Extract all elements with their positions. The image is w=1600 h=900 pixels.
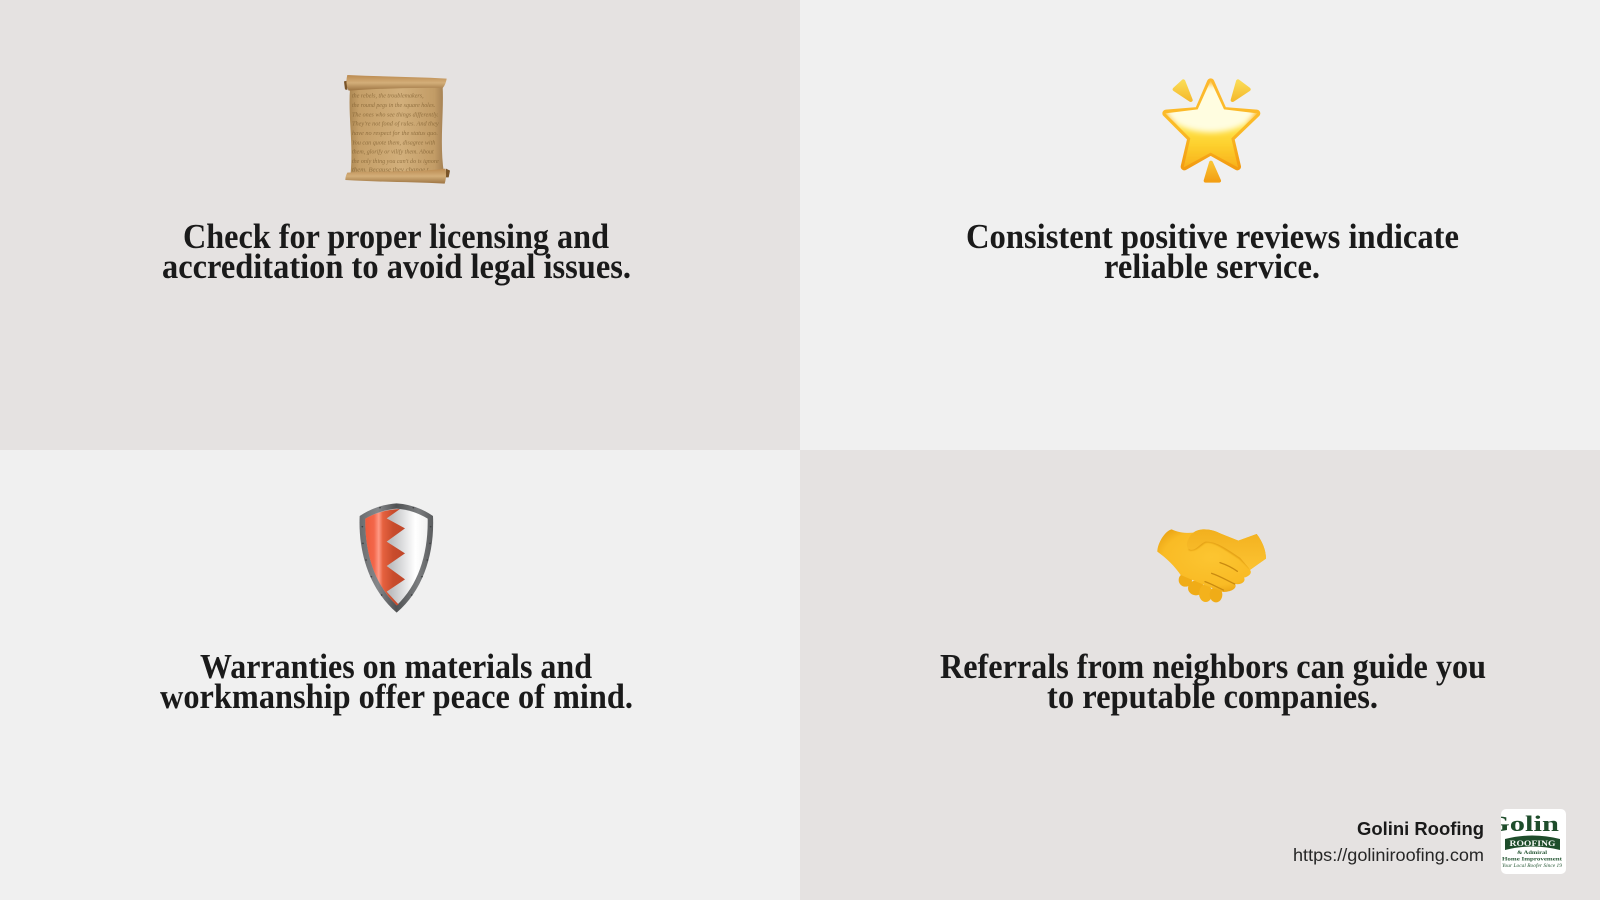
icon: parchment scroll: the round pegs in the square holes. bbox=[352, 102, 436, 109]
heading: warranties: Warranties on materials and bbox=[200, 648, 592, 686]
panel: referrals bbox=[800, 450, 1600, 900]
icon: parchment scroll: They're not fond of rules. And they bbox=[352, 121, 439, 128]
icon: parchment scroll bbox=[344, 75, 450, 184]
heading: reviews: reliable service. bbox=[1104, 248, 1320, 286]
icon: parchment scroll: them. Because they change t bbox=[352, 167, 429, 174]
icon: parchment scroll: the rebels, the troublemakers, bbox=[352, 92, 424, 99]
logo: Golin bbox=[1486, 811, 1559, 836]
heading: reviews: Consistent positive reviews indicate bbox=[966, 218, 1459, 256]
heading: referrals: to reputable companies. bbox=[1047, 678, 1378, 716]
heading: reviews bbox=[966, 218, 1459, 286]
brand name: Golini Roofing bbox=[1357, 818, 1484, 839]
logo bbox=[1501, 809, 1566, 874]
icon: glowing star bbox=[1166, 81, 1257, 181]
logo: Home Improvement bbox=[1502, 856, 1562, 862]
panel: licensing bbox=[0, 0, 800, 450]
logo: & Admiral bbox=[1517, 850, 1548, 856]
heading: referrals bbox=[940, 648, 1486, 716]
panel: reviews bbox=[800, 0, 1600, 450]
icon: parchment scroll: You can quote them, disagree with bbox=[352, 139, 436, 146]
heading: referrals: Referrals from neighbors can guide you bbox=[940, 648, 1486, 686]
brand url: https://goliniroofing.com bbox=[1293, 845, 1484, 865]
icon: parchment scroll: The ones who see things differently. bbox=[352, 111, 439, 118]
heading: licensing bbox=[162, 218, 631, 286]
logo: Your Local Roofer Since 19 bbox=[1502, 862, 1562, 869]
icon: shield bbox=[360, 503, 433, 613]
heading: warranties: workmanship offer peace of mind. bbox=[160, 678, 633, 716]
icon: parchment scroll: them, glorify or vilify them. About bbox=[352, 149, 434, 156]
icon: parchment scroll: the only thing you can't do is ignore bbox=[352, 158, 439, 165]
icon: parchment scroll: have no respect for the status quo. bbox=[352, 130, 438, 137]
panel: warranties bbox=[0, 450, 800, 900]
icon: handshake bbox=[1157, 529, 1266, 602]
logo: ROOFING bbox=[1510, 838, 1556, 848]
heading: warranties bbox=[160, 648, 633, 716]
heading: licensing: accreditation to avoid legal issues. bbox=[162, 248, 631, 286]
heading: licensing: Check for proper licensing and bbox=[183, 218, 609, 256]
